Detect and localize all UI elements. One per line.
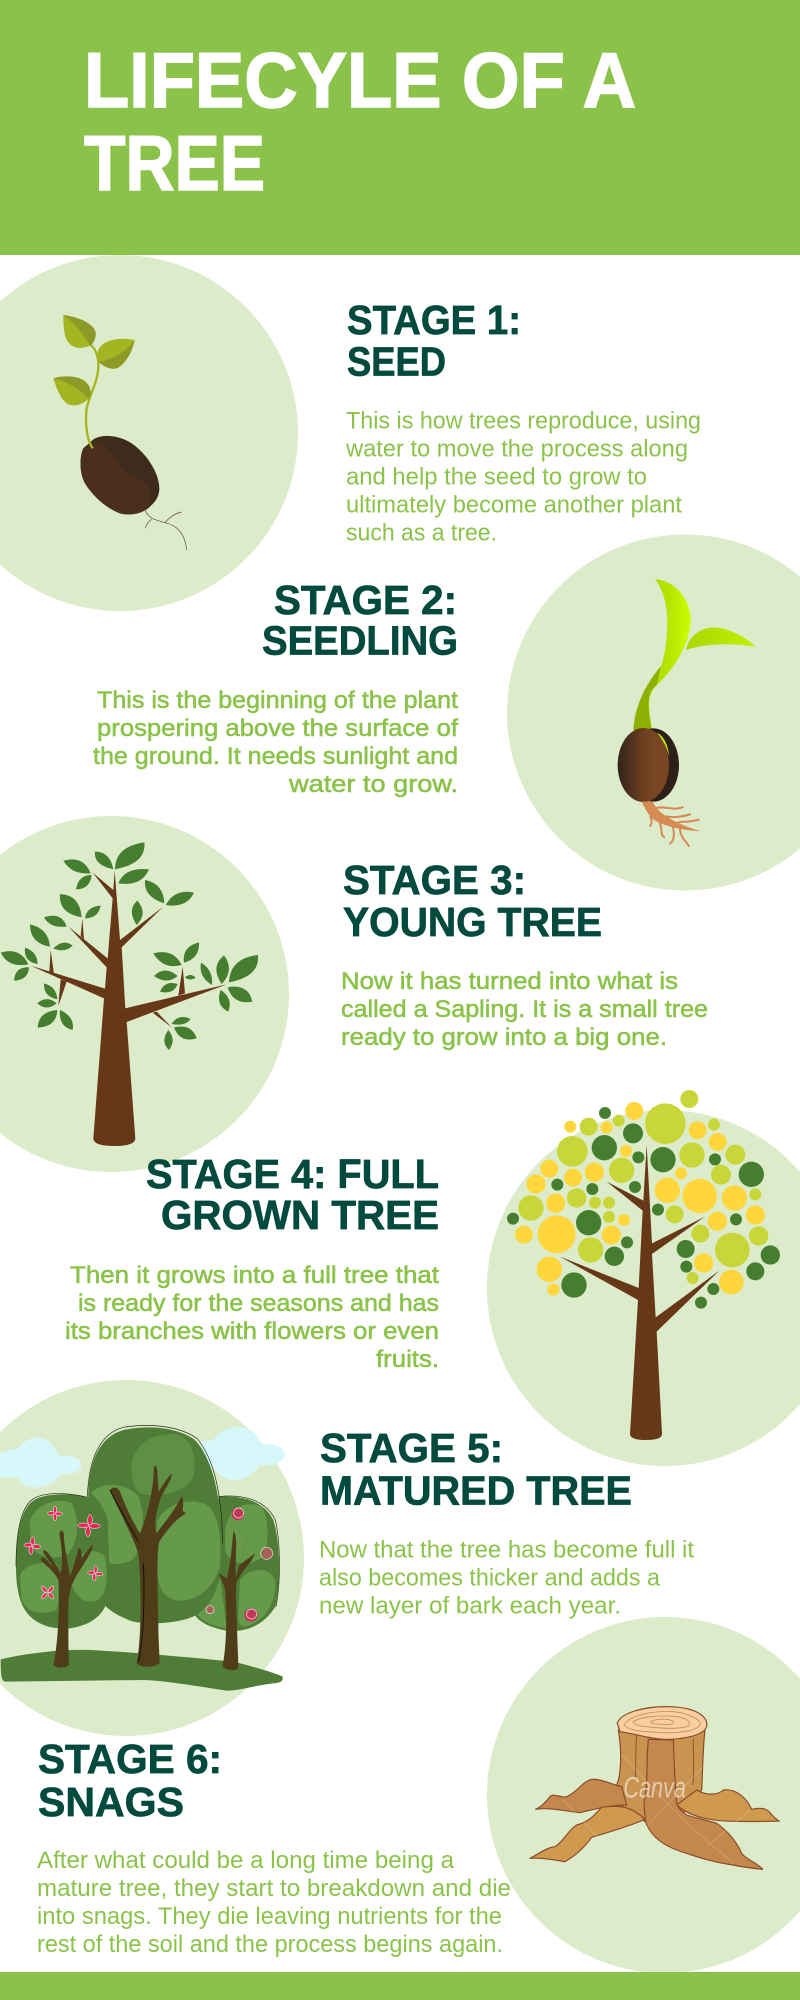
circle background stage 1	[0, 255, 298, 611]
heading: stage 3	[343, 857, 602, 945]
text block: stage 5: Now that the tree has become full it	[319, 1536, 694, 1564]
text block: stage 6: rest of the soil and the process begins again.	[37, 1931, 503, 1958]
heading: stage 6	[38, 1736, 222, 1825]
text block: stage 6: mature tree, they start to breakdown and die	[37, 1875, 511, 1902]
text block: stage 1: ultimately become another plant	[346, 492, 682, 518]
text block: stage 2: water to grow.	[288, 771, 458, 798]
title: TREE	[84, 119, 265, 207]
heading: stage 5: STAGE 5:	[320, 1425, 503, 1471]
heading: stage 4: STAGE 4: FULL	[146, 1151, 439, 1197]
heading: stage 4	[146, 1151, 439, 1238]
title	[84, 36, 636, 207]
text block: stage 1: This is how trees reproduce, using	[346, 408, 701, 434]
text block: stage 3: ready to grow into a big one.	[341, 1024, 667, 1051]
icon: tree stump	[530, 1707, 779, 1869]
panel: stage 4 full grown tree	[65, 1090, 800, 1466]
icon: seedling	[618, 579, 756, 847]
text block: stage 3	[341, 968, 708, 1051]
circle background stage 2	[507, 534, 800, 890]
panel: stage 3 young tree	[0, 816, 708, 1172]
text block: stage 1: water to move the process along	[345, 436, 688, 462]
icon: sprouting seed	[53, 315, 187, 550]
icon: young tree	[1, 842, 258, 1146]
heading: stage 4: GROWN TREE	[161, 1192, 439, 1238]
text block: stage 1	[345, 408, 701, 546]
text block: stage 1: such as a tree.	[346, 520, 497, 546]
panel: stage 6 snags	[37, 1617, 800, 1973]
header banner	[0, 0, 800, 255]
text block: stage 4: its branches with flowers or even	[65, 1318, 439, 1345]
text block: stage 3: called a Sapling. It is a small tree	[341, 996, 708, 1023]
text block: stage 2: This is the beginning of the plant	[97, 687, 458, 714]
text block: stage 2: the ground. It needs sunlight and	[93, 743, 458, 770]
heading: stage 6: STAGE 6:	[38, 1736, 222, 1782]
heading: stage 3: STAGE 3:	[343, 857, 526, 903]
text block: stage 4: Then it grows into a full tree that	[70, 1262, 439, 1289]
text block: stage 5: also becomes thicker and adds a	[319, 1564, 661, 1592]
text block: stage 2	[93, 687, 458, 798]
text block: stage 2: prospering above the surface of	[97, 715, 458, 742]
heading: stage 6: SNAGS	[38, 1779, 184, 1825]
panel: stage 2 seedling	[93, 534, 800, 890]
text block: stage 1: and help the seed to grow to	[346, 464, 647, 490]
text block: stage 3: Now it has turned into what is	[341, 968, 678, 995]
text block: stage 6	[37, 1847, 511, 1958]
text block: stage 5	[319, 1536, 694, 1620]
title: LIFECYLE OF A	[84, 36, 636, 124]
circle background stage 6	[487, 1617, 800, 1973]
text block: stage 6: After what could be a long time being a	[37, 1847, 455, 1874]
text block: stage 4	[65, 1262, 439, 1373]
heading: stage 3: YOUNG TREE	[343, 899, 602, 945]
footer band	[0, 1972, 800, 2000]
heading: stage 1: SEED	[347, 338, 446, 384]
text block: stage 6: into snags. They die leaving nutrients for the	[37, 1903, 502, 1930]
heading: stage 2	[262, 577, 458, 664]
panel: stage 1 seed	[0, 255, 701, 611]
heading: stage 2: STAGE 2:	[274, 577, 457, 623]
text block: stage 4: fruits.	[376, 1346, 439, 1373]
circle background stage 5	[0, 1380, 304, 1736]
heading: stage 1: STAGE 1:	[347, 297, 521, 343]
text block: stage 4: is ready for the seasons and has	[78, 1290, 439, 1317]
icon: full grown tree	[507, 1090, 780, 1440]
heading: stage 1	[347, 297, 521, 384]
heading: stage 5: MATURED TREE	[320, 1468, 632, 1514]
circle background stage 3	[0, 816, 289, 1172]
text block: stage 5: new layer of bark each year.	[319, 1592, 621, 1620]
icon: matured trees with clouds	[0, 1425, 285, 1691]
panel: stage 5 matured tree	[0, 1380, 694, 1736]
heading: stage 5	[320, 1425, 632, 1514]
circle background stage 4	[487, 1110, 800, 1466]
watermark: Canva	[623, 1771, 686, 1804]
heading: stage 2: SEEDLING	[262, 618, 458, 664]
